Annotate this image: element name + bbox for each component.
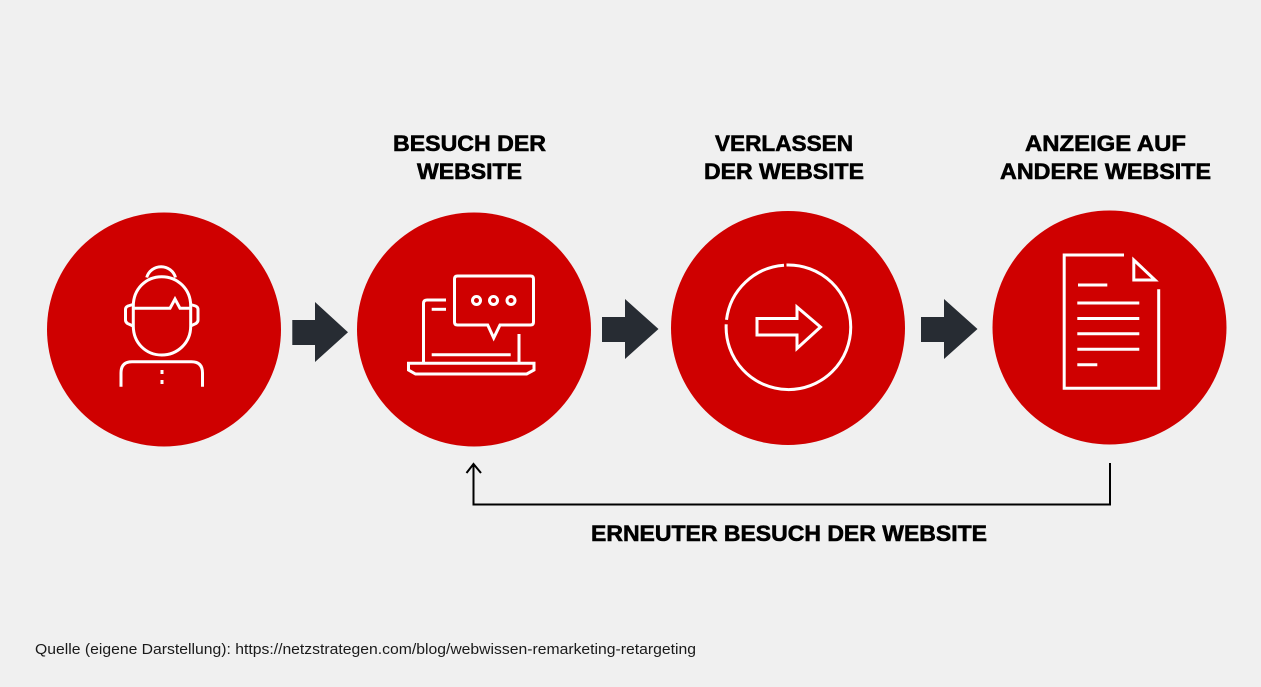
step 4: ad on other website circle — [992, 210, 1226, 444]
source note: Quelle (eigene Darstellung): https://netzstrategen.com/blog/webwissen-remarketing-retargeting — [35, 641, 696, 658]
icon: laptop with speech bubble — [408, 276, 534, 374]
heading: Verlassen der Website: DER WEBSITE — [704, 159, 864, 184]
icon: document — [1064, 255, 1159, 388]
arrow: step 2 to step 3 — [602, 299, 658, 359]
icon: circled arrow — [726, 265, 851, 390]
step 1: visitor circle — [47, 212, 281, 446]
icon: person — [121, 267, 202, 387]
step 3: leaving website circle — [671, 211, 905, 445]
heading: Anzeige auf anderer Website — [1000, 131, 1211, 184]
step 2: website visit circle — [357, 212, 591, 446]
heading: Verlassen der Website: VERLASSEN — [715, 131, 853, 156]
arrow: step 1 to step 2 — [292, 302, 348, 362]
heading: Verlassen der Website — [704, 131, 864, 184]
heading: Besuch der Website: WEBSITE — [417, 159, 522, 184]
heading: Anzeige auf anderer Website: ANZEIGE AUF — [1025, 131, 1186, 156]
heading: Besuch der Website: BESUCH DER — [393, 131, 546, 156]
label: repeat visit: ERNEUTER BESUCH DER WEBSITE — [591, 521, 987, 546]
heading: Besuch der Website — [393, 131, 546, 184]
arrow: step 3 to step 4 — [921, 299, 978, 359]
return arrow: back to website visit — [466, 463, 1110, 504]
heading: Anzeige auf anderer Website: ANDERE WEBSITE — [1000, 159, 1211, 184]
